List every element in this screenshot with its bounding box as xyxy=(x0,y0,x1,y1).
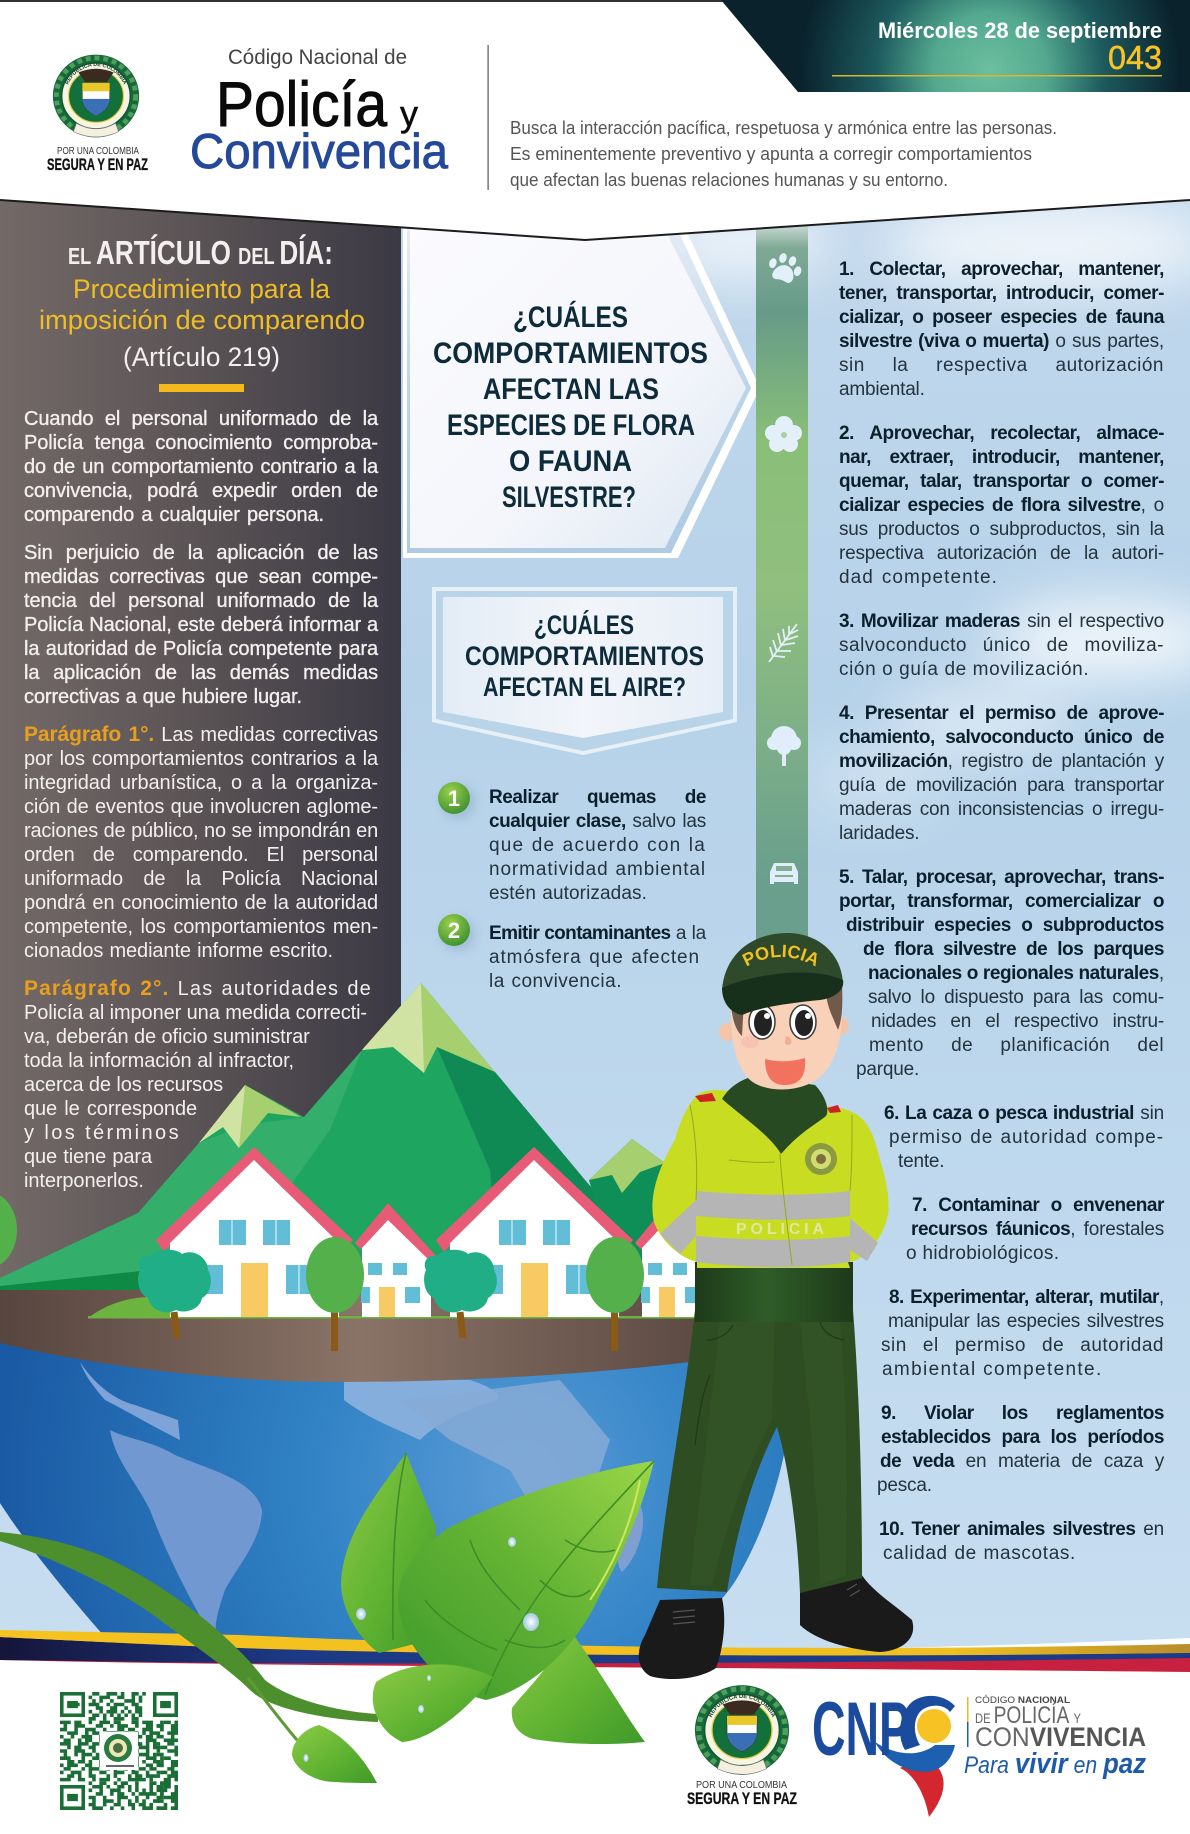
icon: flower xyxy=(765,416,802,452)
list: item 3 xyxy=(839,611,1164,680)
heading: especies de flora o fauna: ¿CUÁLES xyxy=(513,300,628,334)
list: afectan el aire item 1: normatividad ambiental xyxy=(489,859,706,880)
text: paragraph one: comparendo a cualquier persona. xyxy=(24,504,324,526)
list: item 5: mento de planificación del xyxy=(869,1035,1164,1056)
text: paragraph two: la aplicación de las demás medidas xyxy=(24,662,378,684)
list: item 5: salvo lo dispuesto para las comu- xyxy=(868,987,1164,1008)
text: parágrafo 2: que tiene para xyxy=(24,1146,152,1168)
heading: el artículo del día: imposición de comparendo xyxy=(39,305,365,335)
list: item 10: 10. Tener animales silvestres en xyxy=(879,1519,1164,1540)
logo: policía nacional footer: POR UNA COLOMBIA xyxy=(696,1780,787,1791)
list: item 10 xyxy=(879,1519,1164,1564)
text: paragraph two: correctivas a que hubiere lugar. xyxy=(24,686,302,708)
water drops xyxy=(304,1537,539,1762)
leaf bottom xyxy=(292,1725,377,1783)
text: parágrafo 2: toda la información al infractor, xyxy=(24,1050,294,1072)
banner: date and edition: Miércoles 28 de septiembre xyxy=(878,18,1162,43)
logo: cnpc: CONVIVENCIA xyxy=(975,1722,1146,1752)
list: item 2: sus productos o subproductos, sin la xyxy=(839,519,1164,540)
list: item 5: nidades en el respectivo instru- xyxy=(871,1011,1164,1032)
panel: flora y fauna question arrow xyxy=(403,228,760,558)
collar xyxy=(722,1076,827,1154)
vine xyxy=(0,1532,378,1722)
text: parágrafo 2: acerca de los recursos xyxy=(24,1074,223,1096)
list: item 5: de flora silvestre de los parques xyxy=(863,939,1164,960)
title: código nacional de policía y convivencia: Convivencia xyxy=(190,125,449,179)
text: parágrafo 2: y los términos xyxy=(24,1122,181,1144)
colombian flag ribbon xyxy=(0,1630,1190,1672)
heading: especies de flora o fauna: O FAUNA xyxy=(509,445,632,478)
list: item 1: sin la respectiva autorización xyxy=(839,355,1164,376)
heading: afectan el aire: COMPORTAMIENTOS xyxy=(465,641,704,671)
trees xyxy=(0,1192,644,1351)
list: item 1: ambiental. xyxy=(839,379,925,400)
list: afectan el aire item 1: que de acuerdo con la xyxy=(489,835,706,856)
text: parágrafo 1: Parágrafo 1°. Las medidas correctivas xyxy=(24,723,378,746)
list: item 3: salvoconducto único de moviliza- xyxy=(839,635,1164,656)
heading: especies de flora o fauna: COMPORTAMIENTOS xyxy=(433,337,708,370)
text: parágrafo 2: va, deberán de oficio suministrar xyxy=(24,1026,310,1048)
icon: palm leaf xyxy=(769,624,798,662)
text: parágrafo 1: pondrá en conocimiento de la autoridad xyxy=(24,892,378,914)
logo: cnpc xyxy=(812,1687,1146,1817)
header white band xyxy=(0,0,1190,240)
list: item 9: 9. Violar los reglamentos xyxy=(881,1403,1164,1424)
shoes xyxy=(639,1572,913,1679)
green icon strip xyxy=(756,226,808,950)
trousers xyxy=(657,1310,862,1593)
logo: cnpc: CNP xyxy=(812,1687,910,1772)
list: item 7: o hidrobiológicos. xyxy=(906,1243,1059,1264)
icon: car xyxy=(770,863,798,884)
list: item 5: parque. xyxy=(856,1059,919,1080)
title: código nacional de policía y convivencia: Código Nacional de xyxy=(228,46,407,69)
header description: que afectan las buenas relaciones humanas y su entorno. xyxy=(510,170,948,190)
waist xyxy=(695,1262,853,1322)
list: item 6 xyxy=(884,1103,1164,1172)
title: código nacional de policía y convivencia: y xyxy=(400,93,418,134)
list: afectan el aire item 1 xyxy=(489,787,706,904)
list: item 1: tener, transportar, introducir, comer- xyxy=(839,283,1164,304)
trouser shading xyxy=(690,1320,847,1585)
list: item 4 xyxy=(839,703,1164,844)
list: item 4: 4. Presentar el permiso de aprove- xyxy=(839,703,1164,724)
text: paragraph two: tencia del personal uniformado de la xyxy=(24,590,378,612)
trouser seams xyxy=(695,1322,844,1445)
number badge 2 xyxy=(438,914,475,951)
list: item 1 xyxy=(839,259,1165,400)
list: item 5: 5. Talar, procesar, aprovechar, trans- xyxy=(839,867,1164,888)
text: parágrafo 1: por los comportamientos contrarios a la xyxy=(24,748,378,770)
character: police officer xyxy=(638,933,914,1679)
stem xyxy=(248,1678,297,1740)
list: item 2: nar, extraer, introducir, mantener, xyxy=(839,447,1164,468)
heading: afectan el aire: ¿CUÁLES xyxy=(534,609,634,640)
list: item 3: ción o guía de movilización. xyxy=(839,659,1089,680)
list: item 2: 2. Aprovechar, recolectar, almace- xyxy=(839,423,1164,444)
ground island xyxy=(0,1290,720,1382)
text: paragraph two: la autoridad de Policía competente para xyxy=(24,638,378,660)
cap: POLICIA xyxy=(742,944,817,966)
jacket label: POLICIA xyxy=(736,1221,824,1238)
text: parágrafo 2: Parágrafo 2°. Las autoridades de xyxy=(24,977,372,1000)
list: item 1: 1. Colectar, aprovechar, mantener, xyxy=(839,259,1164,280)
leaf edge highlight xyxy=(590,1480,640,1600)
leaf back xyxy=(341,1453,436,1653)
list: item 4: laridades. xyxy=(839,823,919,844)
list: item 5: nacionales o regionales naturales, xyxy=(868,963,1164,984)
number badge 1: 1 xyxy=(448,786,460,811)
list: item 8: ambiental competente. xyxy=(882,1359,1103,1380)
list: item 2 xyxy=(839,423,1164,588)
logo: policía nacional emblem: REPÚBLICA DE COLOMBIA xyxy=(65,62,126,85)
list: afectan el aire item 2: atmósfera que afecten xyxy=(489,947,700,968)
text: paragraph two: medidas correctivas que sean compe- xyxy=(24,566,378,588)
reflective stripes xyxy=(660,1191,878,1267)
footer white area xyxy=(0,1656,1190,1834)
list: item 5: portar, transformar, comercializar o xyxy=(839,891,1164,912)
leaf small right xyxy=(512,1625,645,1744)
list: item 5: distribuir especies o subproductos xyxy=(846,915,1164,936)
list: item 8: sin el permiso de autoridad xyxy=(881,1335,1164,1356)
heading: especies de flora o fauna: AFECTAN LAS xyxy=(483,373,659,406)
list: item 9 xyxy=(877,1403,1164,1496)
text: paragraph one: Cuando el personal uniformado de la xyxy=(24,408,378,430)
epaulets xyxy=(695,1093,841,1113)
text: paragraph one: do de un comportamiento contrario a la xyxy=(24,456,378,478)
text: parágrafo 1: ción de eventos que involucren aglome- xyxy=(24,796,378,818)
number badge 2: 2 xyxy=(448,918,460,943)
heading: afectan el aire: AFECTAN EL AIRE? xyxy=(483,672,686,702)
text: paragraph two: Policía Nacional, este deberá informar a xyxy=(24,614,378,636)
list: item 8 xyxy=(881,1287,1164,1380)
list: item 2: respectiva autorización de la autori- xyxy=(839,543,1164,564)
mountains xyxy=(0,983,680,1292)
text: paragraph one: convivencia, podrá expedir orden de xyxy=(24,480,378,502)
list: item 9: establecidos para los períodos xyxy=(881,1427,1164,1448)
heading: el artículo del día: (Artículo 219) xyxy=(123,342,280,372)
list: item 3: 3. Movilizar maderas sin el respectivo xyxy=(839,611,1164,632)
panel: artículo del día background xyxy=(0,195,401,1355)
heading: especies de flora o fauna: ESPECIES DE FLORA xyxy=(447,409,695,442)
list: item 4: guía de movilización para transportar xyxy=(839,775,1164,796)
title: código nacional de policía y convivencia: Policía xyxy=(216,70,388,140)
list: item 9: de veda en materia de caza y xyxy=(880,1451,1164,1472)
cap xyxy=(722,933,844,1015)
list: item 7 xyxy=(906,1195,1164,1264)
houses xyxy=(88,1147,716,1318)
logo: cnpc: Para vivir en paz xyxy=(964,1748,1146,1780)
list: afectan el aire item 1: cualquier clase, salvo las xyxy=(489,811,706,832)
title: código nacional de policía y convivencia xyxy=(190,46,449,179)
text: paragraph one xyxy=(24,408,378,526)
number badge 1 xyxy=(438,782,475,819)
text: parágrafo 1 xyxy=(24,723,378,962)
list: item 1: cializar, o poseer especies de fauna xyxy=(839,307,1164,328)
panel: aire question box xyxy=(432,587,737,755)
list: afectan el aire item 2: Emitir contaminantes a la xyxy=(489,923,706,944)
list: item 4: movilización, registro de plantación y xyxy=(839,751,1164,772)
text: parágrafo 1: cionados mediante informe escrito. xyxy=(24,940,333,962)
header description: Es eminentemente preventivo y apunta a corregir comportamientos xyxy=(510,144,1032,164)
globe xyxy=(0,1340,794,1665)
text: parágrafo 2: interponerlos. xyxy=(24,1170,144,1192)
logo: policía nacional footer xyxy=(687,1685,797,1808)
text: parágrafo 1: uniformado de la Policía Nacional xyxy=(24,868,378,890)
qr code xyxy=(60,1694,178,1808)
text: parágrafo 1: competente, los comportamientos men- xyxy=(24,916,378,938)
chest emblem xyxy=(805,1143,837,1175)
list: afectan el aire item 2: la convivencia. xyxy=(489,971,622,992)
text: parágrafo 1: raciones de público, no se impondrán en xyxy=(24,820,378,842)
list: item 8: manipular las especies silvestres xyxy=(888,1311,1164,1332)
list: item 7: 7. Contaminar o envenenar xyxy=(912,1195,1164,1216)
logo: cnpc: CÓDIGO NACIONAL xyxy=(975,1695,1071,1705)
text: parágrafo 1: integridad urbanística, o a la organiza- xyxy=(24,772,378,794)
text: parágrafo 2: que le corresponde xyxy=(24,1098,197,1120)
list: item 1: silvestre (viva o muerta) o sus partes, xyxy=(839,331,1164,352)
heading: el artículo del día xyxy=(39,234,365,392)
header description xyxy=(510,118,1057,190)
icon: paw xyxy=(765,250,805,286)
header description: Busca la interacción pacífica, respetuosa y armónica entre las personas. xyxy=(510,118,1057,138)
list: item 4: maderas con inconsistencias o irregu- xyxy=(839,799,1164,820)
heading: el artículo del día: Procedimiento para la xyxy=(73,274,331,304)
heading: el artículo del día: EL ARTÍCULO DEL DÍA: xyxy=(68,234,333,271)
icon: tree xyxy=(767,726,801,766)
jacket xyxy=(652,1090,889,1268)
text: parágrafo 2: Policía al imponer una medida correcti- xyxy=(24,1002,367,1024)
list: item 7: recursos fáunicos, forestales xyxy=(911,1219,1164,1240)
text: paragraph two: Sin perjuicio de la aplicación de las xyxy=(24,542,378,564)
list: item 6: 6. La caza o pesca industrial sin xyxy=(884,1103,1164,1124)
list: item 8: 8. Experimentar, alterar, mutilar, xyxy=(889,1287,1164,1308)
list: item 10: calidad de mascotas. xyxy=(883,1543,1076,1564)
text: parágrafo 2 xyxy=(24,977,372,1192)
heading: especies de flora o fauna xyxy=(433,300,708,514)
top black rule xyxy=(0,0,1190,2)
list: item 2: cializar especies de flora silvestre, o xyxy=(839,495,1164,516)
list: item 2: quemar, talar, transportar o comer- xyxy=(839,471,1164,492)
logo: policía nacional emblem: POR UNA COLOMBIA xyxy=(57,146,139,157)
logo: policía nacional footer: REPÚBLICA DE COLOMBIA xyxy=(708,1694,776,1718)
logo: policía nacional footer: SEGURA Y EN PAZ xyxy=(687,1789,797,1808)
leaf veins xyxy=(393,1453,654,1695)
text: parágrafo 1: orden de comparendo. El personal xyxy=(24,844,378,866)
jacket seams xyxy=(690,1105,852,1265)
list: item 2: dad competente. xyxy=(839,567,998,588)
heading: afectan el aire xyxy=(465,609,704,702)
list: afectan el aire item 1: Realizar quemas de xyxy=(489,787,706,808)
leaf large xyxy=(398,1461,654,1700)
banner: date and edition: 043 xyxy=(1108,39,1162,76)
text: paragraph two xyxy=(24,542,378,708)
header lower edge xyxy=(0,200,1190,240)
head xyxy=(719,985,849,1089)
list: afectan el aire item 1: estén autorizadas. xyxy=(489,883,647,904)
leaf small left xyxy=(373,1664,493,1742)
plant with water drops xyxy=(0,1453,654,1783)
list: item 4: chamiento, salvoconducto único de xyxy=(839,727,1164,748)
list: item 6: tente. xyxy=(898,1151,944,1172)
list: item 9: pesca. xyxy=(877,1475,932,1496)
logo: policía nacional emblem: SEGURA Y EN PAZ xyxy=(47,155,148,174)
list: item 6: permiso de autoridad compe- xyxy=(889,1127,1164,1148)
logo: policía nacional emblem xyxy=(47,54,148,174)
list: afectan el aire item 2 xyxy=(489,923,706,992)
text: paragraph one: Policía tenga conocimiento comproba- xyxy=(24,432,378,454)
heading: especies de flora o fauna: SILVESTRE? xyxy=(502,481,636,514)
header divider xyxy=(488,45,489,190)
logo: cnpc: DE POLICÍA Y xyxy=(975,1702,1082,1729)
list: item 5 xyxy=(839,867,1164,1080)
shoe laces xyxy=(673,1584,860,1624)
banner: date and edition xyxy=(721,0,1190,92)
